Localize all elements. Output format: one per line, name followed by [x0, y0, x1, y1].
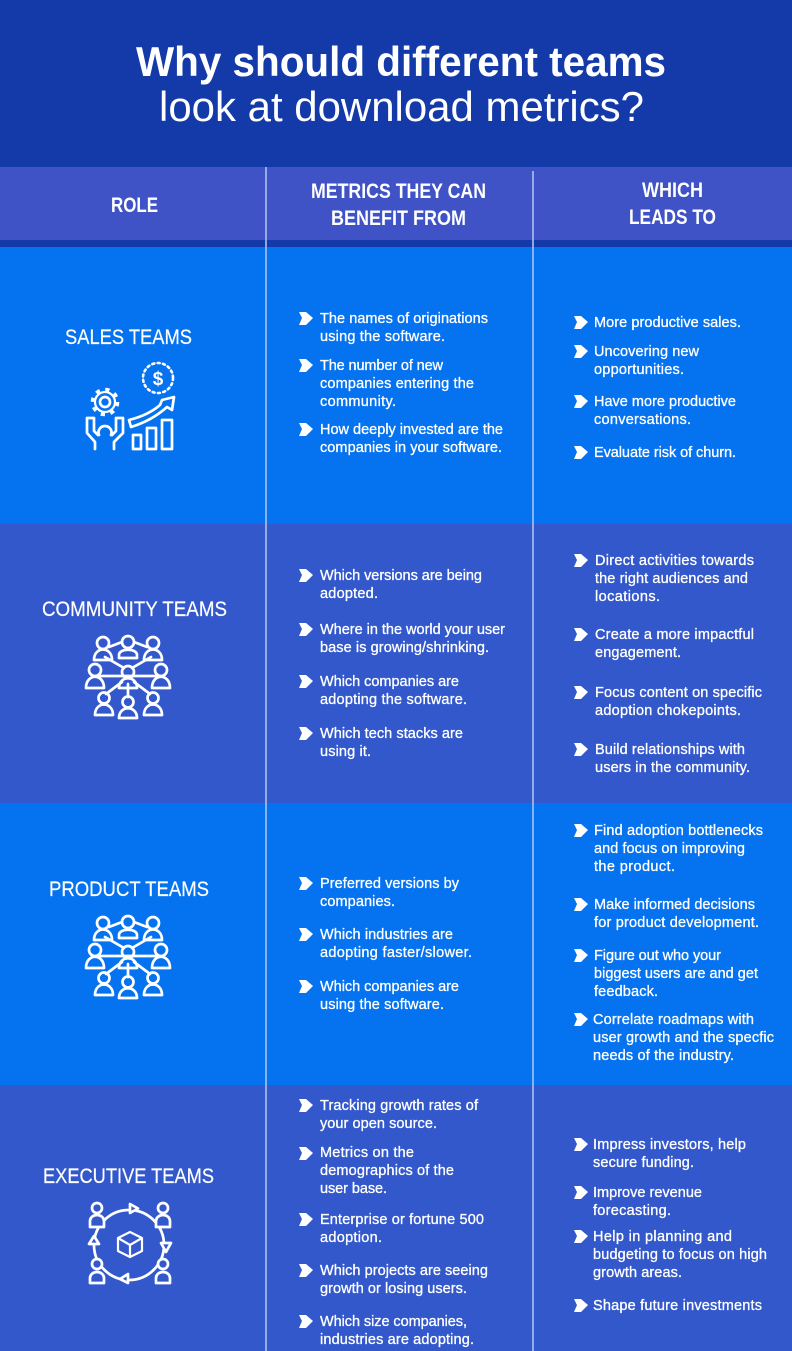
list: community metrics: using it. [320, 744, 371, 760]
list: community metrics: Which versions are being [320, 568, 482, 584]
panel: executive row [0, 1085, 792, 1351]
column headings: METRICS THEY CAN [311, 180, 486, 203]
list: product outcomes: needs of the industry. [593, 1048, 734, 1064]
list: community outcomes: adoption chokepoints. [595, 703, 741, 719]
list: product outcomes: Correlate roadmaps with [593, 1012, 754, 1028]
list: community outcomes: engagement. [595, 645, 681, 661]
list: product outcomes: user growth and the specfic [593, 1030, 774, 1046]
icon: sales growth [87, 363, 174, 449]
list: product metrics: adopting faster/slower. [320, 945, 472, 961]
title: Why should different teams [136, 38, 666, 85]
list: community outcomes: Create a more impactful [595, 627, 754, 643]
title [136, 38, 666, 130]
list: executive metrics: Metrics on the [320, 1145, 414, 1161]
list: community outcomes: Focus content on specific [595, 685, 762, 701]
list: sales metrics: companies in your software. [320, 440, 502, 456]
list: sales metrics: The names of originations [320, 311, 488, 327]
list: product metrics: Which industries are [320, 927, 453, 943]
list: executive outcomes: Improve revenue [593, 1185, 702, 1201]
list: community metrics: adopted. [320, 586, 378, 602]
list: community outcomes: the right audiences and [595, 571, 748, 587]
list: sales metrics: companies entering the [320, 376, 474, 392]
column headings: LEADS TO [629, 206, 716, 229]
list: sales outcomes: Evaluate risk of churn. [594, 445, 736, 461]
list: sales metrics: community. [320, 394, 396, 410]
list: community outcomes: users in the community. [595, 760, 750, 776]
list: executive outcomes: Help in planning and [593, 1229, 732, 1245]
list: executive outcomes: Impress investors, help [593, 1137, 746, 1153]
list: sales metrics: using the software. [320, 329, 445, 345]
list: product outcomes: Make informed decisions [594, 897, 755, 913]
heading: product teams: PRODUCT TEAMS [49, 878, 209, 901]
list: product outcomes: Figure out who your [594, 948, 721, 964]
list: sales metrics [299, 311, 503, 456]
list: product outcomes: biggest users are and get [594, 966, 758, 982]
list: sales metrics: How deeply invested are the [320, 422, 503, 438]
list: product metrics: Preferred versions by [320, 876, 460, 892]
icon: sales growth: $ [153, 369, 164, 390]
list: executive metrics: Enterprise or fortune 500 [320, 1212, 484, 1228]
list: product outcomes: the product. [594, 859, 675, 875]
list: sales outcomes: opportunities. [594, 362, 684, 378]
list: sales outcomes: conversations. [594, 412, 691, 428]
heading: executive teams: EXECUTIVE TEAMS [43, 1165, 214, 1188]
icon: product network [86, 916, 170, 998]
column headings: ROLE [111, 194, 158, 217]
heading: sales teams: SALES TEAMS [65, 326, 192, 349]
column header band [0, 167, 792, 240]
list: sales outcomes [574, 315, 741, 461]
list: product outcomes: Find adoption bottlenecks [594, 823, 763, 839]
list: community metrics: base is growing/shrinking. [320, 640, 489, 656]
list: product outcomes: and focus on improving [594, 841, 745, 857]
list: sales outcomes: Have more productive [594, 394, 736, 410]
column headings: WHICH [642, 179, 703, 202]
list: sales metrics: The number of new [320, 358, 444, 374]
list: community outcomes: Direct activities towards [595, 553, 754, 569]
list: community metrics [299, 568, 505, 760]
list: community metrics: Which companies are [320, 674, 459, 690]
column headings [111, 179, 716, 230]
list: community outcomes [574, 553, 762, 776]
list: product metrics: Which companies are [320, 979, 459, 995]
list: executive metrics: your open source. [320, 1116, 437, 1132]
panel: community row [0, 524, 792, 803]
list: product metrics: companies. [320, 894, 395, 910]
column headings: BENEFIT FROM [331, 207, 466, 230]
list: executive outcomes: Shape future investments [593, 1298, 762, 1314]
list: product outcomes: for product development. [594, 915, 759, 931]
list: executive metrics [299, 1098, 488, 1348]
list: community outcomes: locations. [595, 589, 660, 605]
list: executive metrics: demographics of the [320, 1163, 454, 1179]
heading: community teams: COMMUNITY TEAMS [42, 598, 227, 621]
list: product metrics: using the software. [320, 997, 444, 1013]
list: product outcomes [574, 823, 774, 1064]
list: sales outcomes: Uncovering new [594, 344, 700, 360]
list: sales outcomes: More productive sales. [594, 315, 741, 331]
icon: community network [86, 636, 170, 718]
list: executive outcomes: secure funding. [593, 1155, 694, 1171]
list: executive metrics: Which projects are seeing [320, 1263, 488, 1279]
list: executive metrics: Which size companies, [320, 1314, 467, 1330]
list: executive outcomes [574, 1137, 767, 1314]
list: product metrics [299, 876, 472, 1013]
list: executive metrics: Tracking growth rates of [320, 1098, 479, 1114]
list: executive metrics: user base. [320, 1181, 387, 1197]
list: community metrics: adopting the software. [320, 692, 467, 708]
list: executive metrics: adoption. [320, 1230, 382, 1246]
list: community outcomes: Build relationships with [595, 742, 745, 758]
panel: sales row [0, 247, 792, 524]
list: executive metrics: growth or losing users. [320, 1281, 467, 1297]
list: community metrics: Where in the world your user [320, 622, 505, 638]
list: executive metrics: industries are adopting. [320, 1332, 474, 1348]
header background [0, 0, 792, 167]
title: look at download metrics? [159, 83, 644, 130]
panel: product row [0, 803, 792, 1085]
list: executive outcomes: growth areas. [593, 1265, 682, 1281]
list: product outcomes: feedback. [594, 984, 658, 1000]
list: community metrics: Which tech stacks are [320, 726, 463, 742]
icon: executive cycle [89, 1203, 171, 1283]
list: executive outcomes: forecasting. [593, 1203, 671, 1219]
band shadow [0, 240, 792, 247]
list: executive outcomes: budgeting to focus on high [593, 1247, 767, 1263]
